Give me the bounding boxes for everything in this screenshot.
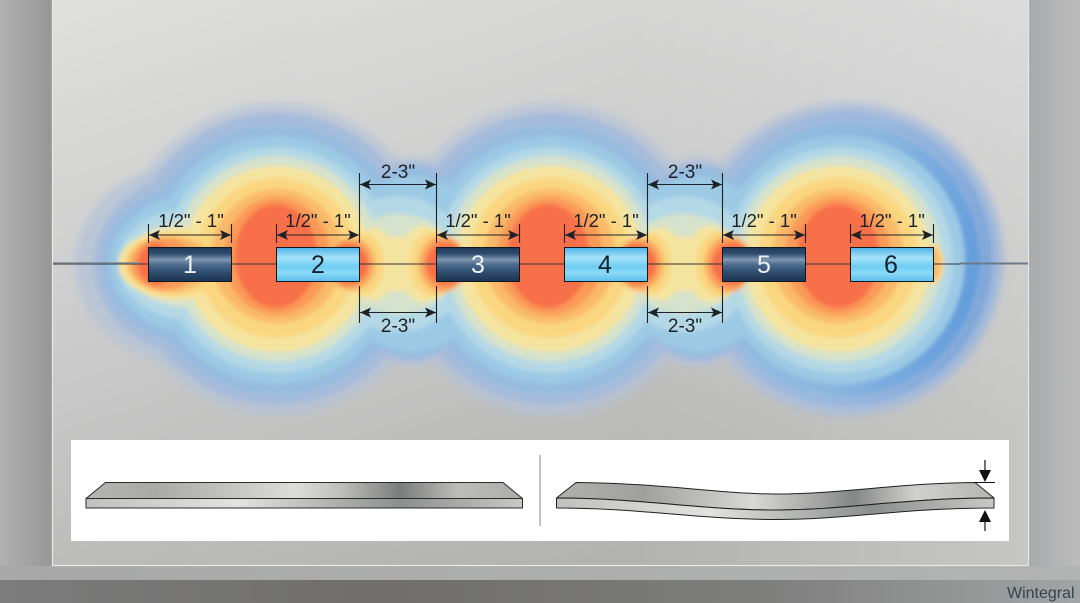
- dimension: lower gap 4 to 5: 2-3": [668, 316, 702, 337]
- flat plate: [86, 482, 522, 508]
- stitch 1: 1: [183, 251, 197, 279]
- stitch 6: 6: [884, 251, 898, 279]
- stitch 2: 2: [311, 251, 325, 279]
- warped plate: [556, 482, 994, 520]
- dimension: stitch 2 length: [276, 210, 359, 243]
- stitch 4: [564, 248, 648, 282]
- stitch 3: [436, 248, 520, 282]
- weld seam line: [53, 263, 1028, 264]
- dimension: upper gap 2 to 3: 2-3": [381, 162, 415, 183]
- dimension: lower gap 2 to 3: [360, 286, 436, 337]
- stitch 3: 3: [471, 251, 485, 279]
- dimension: upper gap 4 to 5: [648, 162, 722, 243]
- dimension: stitch 1 length: [148, 210, 232, 243]
- heat map: overlapping temperature contours around the weld stitches: [75, 103, 1002, 415]
- panel divider: [540, 455, 541, 526]
- dimension: stitch 3 length: 1/2" - 1": [445, 210, 511, 231]
- dimension: upper gap 4 to 5: 2-3": [668, 162, 702, 183]
- stitch 5: 5: [757, 251, 771, 279]
- stitch 2: [276, 248, 360, 282]
- dimension: lower gap 2 to 3: 2-3": [381, 316, 415, 337]
- stitch 5: [722, 248, 806, 282]
- stitch 6: [850, 248, 934, 282]
- distortion measurement arrows: [975, 460, 995, 531]
- stitch 1: [148, 248, 232, 282]
- dimension: stitch 2 length: 1/2" - 1": [285, 210, 351, 231]
- dimension: stitch 5 length: [723, 210, 806, 243]
- dimension: stitch 6 length: [850, 210, 934, 243]
- dimension: stitch 1 length: 1/2" - 1": [158, 210, 224, 231]
- watermark: Wintegral: [1007, 585, 1075, 602]
- dimension: stitch 3 length: [437, 210, 520, 243]
- white comparison panel: [71, 440, 1009, 541]
- dimension: stitch 4 length: 1/2" - 1": [573, 210, 639, 231]
- dimension: stitch 6 length: 1/2" - 1": [859, 210, 925, 231]
- dimension: upper gap 2 to 3: [360, 162, 436, 243]
- dimension: lower gap 4 to 5: [648, 286, 722, 337]
- dimension: stitch 4 length: [564, 210, 647, 243]
- dimension: stitch 5 length: 1/2" - 1": [731, 210, 797, 231]
- stitch 4: 4: [598, 251, 612, 279]
